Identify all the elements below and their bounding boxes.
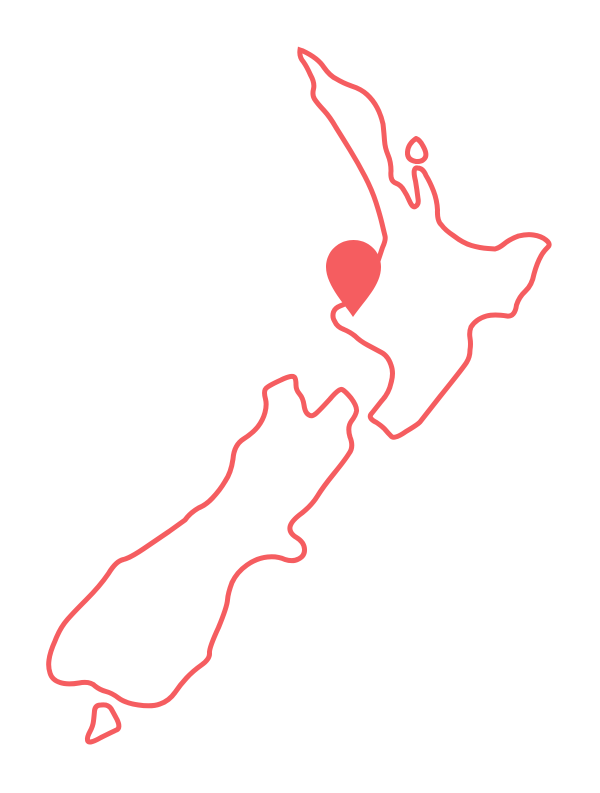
Stewart Island outline [87,705,119,742]
North Island outline [300,50,549,437]
icon: location pin [326,240,381,317]
South Island outline [49,376,357,706]
Great Barrier Island outline [407,138,426,162]
